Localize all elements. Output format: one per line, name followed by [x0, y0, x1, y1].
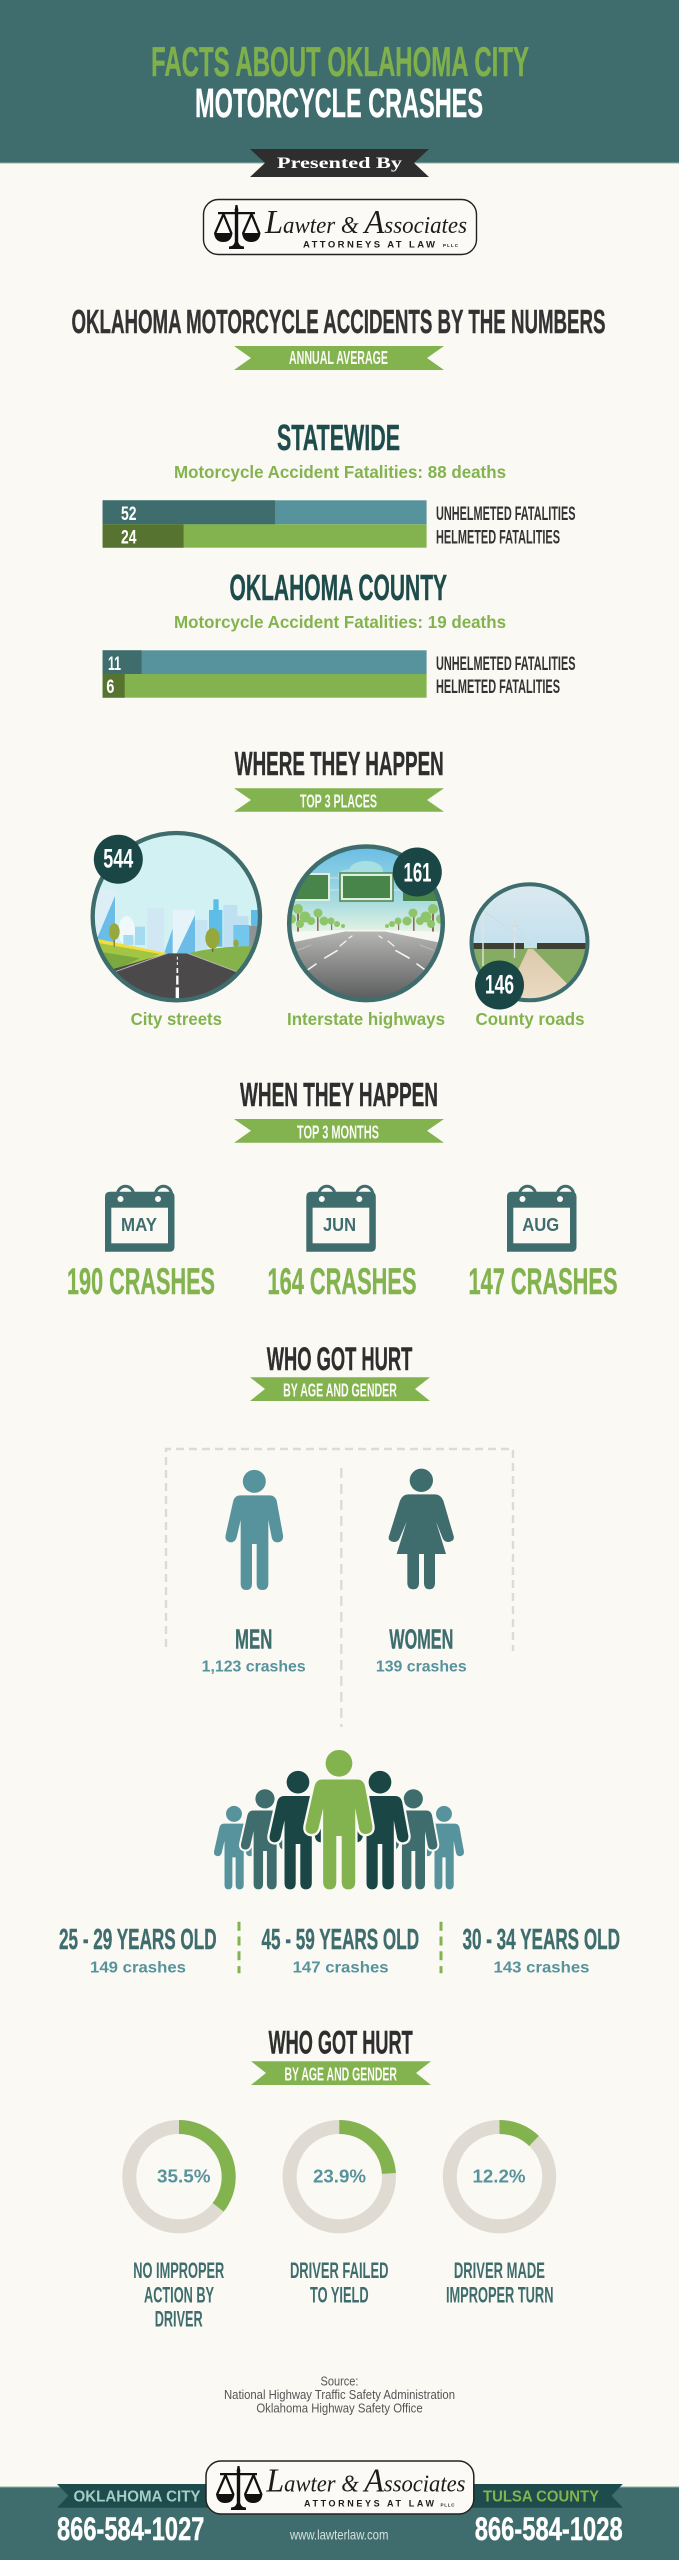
logo: Lawter and Associates: Lawter & Associates	[264, 204, 467, 241]
label: no improper action by driver	[133, 2258, 224, 2332]
stat: 164 crashes: 164 CRASHES	[268, 1261, 416, 1302]
stat: 45-59 years old	[262, 1924, 419, 1976]
icon: county road scene	[470, 882, 590, 1004]
badge: 544	[94, 835, 143, 884]
icon: man	[225, 1470, 283, 1590]
bar chart: statewide: 24	[121, 526, 137, 548]
source: National Highway Traffic Safety Administration	[224, 2387, 455, 2402]
source: Oklahoma Highway Safety Office	[256, 2400, 423, 2415]
icon: interstate highway scene	[285, 844, 448, 1004]
label: driver made improper turn	[446, 2258, 553, 2307]
donut chart: 12.2%: 12.2%	[472, 2166, 526, 2187]
ribbon: by age and gender	[250, 1377, 430, 1401]
bar chart: county	[103, 650, 575, 698]
calendar: Jun	[306, 1186, 376, 1252]
bar chart: statewide: UNHELMETED FATALITIES	[436, 503, 576, 525]
label: men: MEN	[235, 1623, 272, 1654]
calendar: May: MAY	[121, 1215, 157, 1235]
footer logo: ATTORNEYS AT LAW	[304, 2499, 434, 2509]
label: interstate highways: Interstate highways	[287, 1009, 445, 1029]
label: city streets: City streets	[131, 1009, 222, 1029]
ribbon: presented by: Presented By	[277, 155, 402, 172]
stat: 25-29 years old: 25 - 29 YEARS OLD	[59, 1924, 217, 1956]
ribbon: Tulsa County	[465, 2484, 623, 2508]
label: women	[376, 1623, 467, 1676]
ribbon: top 3 months	[234, 1119, 444, 1143]
badge: 161: 161	[404, 858, 432, 888]
label: driver failed to yield	[290, 2258, 388, 2307]
donut chart: 35.5%	[129, 2127, 229, 2226]
icon: crowd of people	[214, 1750, 464, 1889]
label: driver failed to yield: TO YIELD	[310, 2282, 369, 2307]
badge: 146: 146	[485, 970, 514, 1000]
logo: Lawter and Associates: PLLC	[443, 243, 459, 248]
bar chart: county: 11	[108, 653, 121, 675]
panel: statewide	[103, 417, 575, 548]
badge: 146	[475, 960, 524, 1010]
bar chart: county: HELMETED FATALITIES	[436, 676, 560, 698]
stat: 45-59 years old: 147 crashes	[293, 1959, 389, 1976]
label: no improper action by driver: ACTION BY	[144, 2282, 214, 2307]
heading: oklahoma county: OKLAHOMA COUNTY	[230, 567, 447, 608]
calendar: Aug	[507, 1186, 576, 1252]
label: men	[202, 1623, 306, 1676]
calendar: Jun: JUN	[323, 1215, 356, 1235]
label: driver made improper turn: DRIVER MADE	[454, 2258, 545, 2283]
label: no improper action by driver: DRIVER	[155, 2307, 203, 2332]
ribbon: Oklahoma City: OKLAHOMA CITY	[74, 2489, 201, 2506]
heading: who got hurt second: WHO GOT HURT	[268, 2024, 413, 2060]
donut chart: 12.2%	[450, 2127, 549, 2226]
stat: 190 crashes: 190 CRASHES	[67, 1261, 215, 1302]
donut chart: 23.9%	[290, 2127, 389, 2226]
label: men: 1,123 crashes	[202, 1659, 306, 1676]
ribbon: annual average	[234, 346, 444, 370]
icon: city street scene	[87, 830, 267, 1010]
label: no improper action by driver: NO IMPROPER	[133, 2258, 224, 2283]
heading: where they happen: WHERE THEY HAPPEN	[235, 745, 444, 782]
bar chart: statewide: 52	[121, 503, 137, 525]
footer band	[0, 2486, 679, 2560]
bar chart: statewide	[103, 500, 575, 548]
label: county roads: County roads	[476, 1009, 585, 1029]
header band	[0, 0, 679, 164]
donut chart: 35.5%: 35.5%	[157, 2166, 211, 2187]
logo: Lawter and Associates: ATTORNEYS AT LAW	[303, 239, 435, 250]
subheading: county fatalities: Motorcycle Accident Fatalities: 19 deaths	[174, 612, 506, 632]
stat: 25-29 years old	[59, 1924, 217, 1976]
stat: 30-34 years old: 143 crashes	[494, 1959, 590, 1976]
calendar: May	[105, 1186, 174, 1252]
ribbon: by age and gender second: BY AGE AND GENDER	[284, 2064, 397, 2085]
heading: who got hurt: WHO GOT HURT	[267, 1341, 413, 1377]
ribbon: annual average: ANNUAL AVERAGE	[289, 348, 388, 368]
badge: 544: 544	[103, 844, 133, 874]
stat: 45-59 years old: 45 - 59 YEARS OLD	[262, 1924, 419, 1956]
ribbon: top 3 months: TOP 3 MONTHS	[297, 1122, 379, 1142]
bar chart: county: 6	[106, 676, 115, 698]
bar chart: statewide: HELMETED FATALITIES	[436, 526, 560, 548]
label: women: WOMEN	[389, 1623, 453, 1654]
footer logo	[206, 2461, 474, 2514]
ribbon: top 3 places: TOP 3 PLACES	[300, 792, 377, 812]
donut chart: 23.9%: 23.9%	[313, 2166, 366, 2187]
ribbon: Oklahoma City	[57, 2484, 215, 2508]
icon: woman	[389, 1469, 454, 1589]
ribbon: Tulsa County: TULSA COUNTY	[483, 2489, 600, 2506]
footer logo: PLLC	[440, 2502, 455, 2508]
footer logo: Lawter & Associates	[265, 2463, 465, 2500]
calendar: Aug: AUG	[522, 1215, 559, 1235]
phone: Oklahoma City: 866-584-1027	[57, 2511, 204, 2547]
logo: Lawter and Associates	[204, 200, 476, 254]
phone: Tulsa County: 866-584-1028	[475, 2511, 623, 2547]
ribbon: by age and gender: BY AGE AND GENDER	[283, 1380, 397, 1401]
badge: 161	[393, 848, 442, 896]
heading: statewide: STATEWIDE	[277, 417, 400, 458]
panel: oklahoma county	[103, 567, 575, 698]
stat: 30-34 years old	[462, 1924, 620, 1976]
subheading: statewide fatalities: Motorcycle Accident Fatalities: 88 deaths	[174, 462, 506, 482]
label: driver failed to yield: DRIVER FAILED	[290, 2258, 388, 2283]
title	[151, 38, 529, 126]
bar chart: county: UNHELMETED FATALITIES	[436, 653, 576, 675]
stat: 25-29 years old: 149 crashes	[90, 1959, 186, 1976]
ribbon: top 3 places	[234, 788, 444, 812]
label: women: 139 crashes	[376, 1659, 467, 1676]
green dashed dividers	[239, 1922, 441, 1973]
ribbon: by age and gender second	[251, 2061, 431, 2085]
label: driver made improper turn: IMPROPER TURN	[446, 2282, 553, 2307]
website: www.lawterlaw.com	[289, 2526, 388, 2542]
ribbon: presented by	[250, 149, 429, 177]
source	[224, 2374, 455, 2415]
dashed connector	[166, 1449, 513, 1727]
source: Source:	[320, 2374, 358, 2389]
heading: when they happen: WHEN THEY HAPPEN	[240, 1076, 438, 1113]
